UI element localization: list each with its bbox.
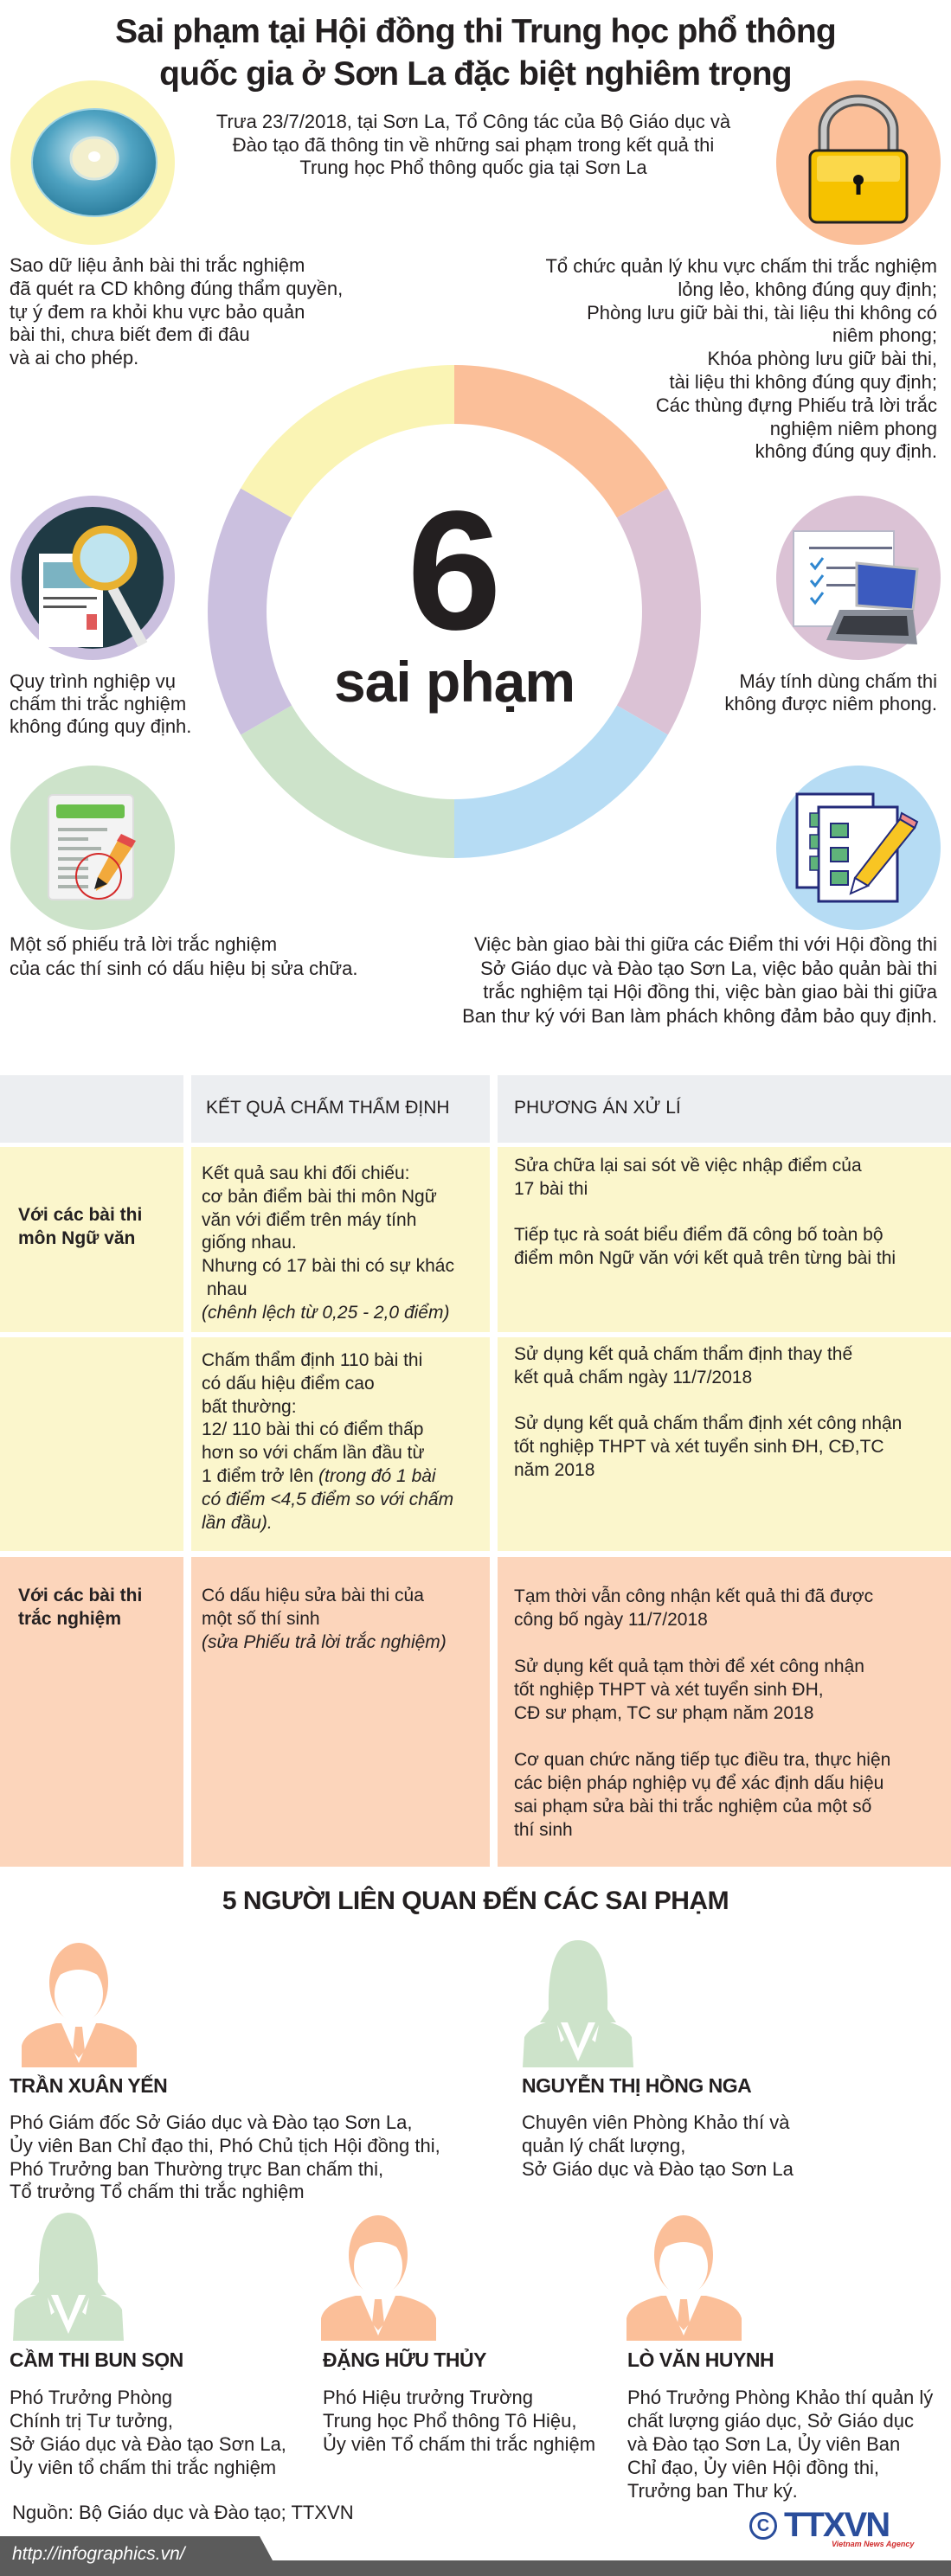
- table header: handling: PHƯƠNG ÁN XỬ LÍ: [514, 1098, 681, 1118]
- center number: 6: [407, 476, 502, 665]
- intro text: Đào tạo đã thông tin về những sai phạm trong kết quả thi: [233, 133, 714, 156]
- role: Chuyên viên Phòng Khảo thí và: [522, 2111, 789, 2133]
- role: chất lượng giáo dục, Sở Giáo dục: [627, 2410, 914, 2432]
- footer bar: [0, 2536, 951, 2576]
- table row 1 handling: Tiếp tục rà soát biểu điểm đã công bố toàn bộ: [514, 1225, 884, 1245]
- role: quản lý chất lượng,: [522, 2135, 685, 2156]
- table row 2 results: 1 điểm trở lên (trong đó 1 bài: [202, 1466, 436, 1486]
- text: answer sheet violation: [10, 933, 357, 979]
- table row 3 handling: sai phạm sửa bài thi trắc nghiệm của một số: [514, 1797, 871, 1817]
- person icon: Lò Văn Huynh (male): [627, 2215, 742, 2341]
- text: storage violation: [545, 255, 937, 462]
- table row 2 handling: Sử dụng kết quả chấm thẩm định xét công nhận: [514, 1413, 902, 1433]
- text: handover violation: Việc bàn giao bài thi giữa các Điểm thi với Hội đồng thi: [474, 933, 937, 955]
- icon: answer sheet with pencil: [10, 766, 175, 930]
- table row 2 results: Chấm thẩm định 110 bài thi: [202, 1350, 422, 1370]
- role: Phó Trưởng Phòng Khảo thí quản lý: [627, 2387, 933, 2408]
- role: Ủy viên Tổ chấm thi trắc nghiệm: [323, 2433, 595, 2455]
- icon: CD disc: [10, 80, 175, 245]
- role: và Đào tạo Sơn La, Ủy viên Ban: [627, 2433, 900, 2455]
- role: Chỉ đạo, Ủy viên Hội đồng thi,: [627, 2457, 879, 2478]
- table row 3 handling: Tạm thời vẫn công nhận kết quả thi đã được: [514, 1586, 873, 1606]
- table row 1 results: (chênh lệch từ 0,25 - 2,0 điểm): [202, 1303, 449, 1323]
- logo: TTXVN: Vietnam News Agency: [832, 2540, 914, 2548]
- person: Trần Xuân Yến: [10, 2074, 440, 2202]
- name: TRẦN XUÂN YẾN: [10, 2074, 167, 2097]
- text: CD violation: và ai cho phép.: [10, 347, 138, 368]
- table row 2 results: [191, 1337, 490, 1551]
- role: Phó Trưởng Phòng: [10, 2387, 172, 2408]
- icon: checklist with pencil: [776, 766, 941, 930]
- title: [115, 13, 836, 93]
- text: answer sheet violation: Một số phiếu trả lời trắc nghiệm: [10, 933, 277, 955]
- role: Phó Hiệu trưởng Trường: [323, 2387, 533, 2408]
- table row 3 handling: Cơ quan chức năng tiếp tục điều tra, thực hiện: [514, 1750, 890, 1770]
- intro text: Trung học Phổ thông quốc gia tại Sơn La: [299, 157, 647, 178]
- name: CẦM THI BUN SỌN: [10, 2349, 183, 2371]
- table header: results: KẾT QUẢ CHẤM THẨM ĐỊNH: [206, 1098, 450, 1118]
- name: ĐẶNG HỮU THỦY: [323, 2349, 486, 2371]
- icon: magnifier on document: [10, 496, 175, 660]
- icon: checklist and laptop: [776, 496, 941, 660]
- table row 1 label: môn Ngữ văn: [18, 1228, 135, 1248]
- table row 3 handling: tốt nghiệp THPT và xét tuyển sinh ĐH,: [514, 1680, 824, 1700]
- text: storage violation: nghiệm niêm phong: [770, 418, 937, 439]
- title: Sai phạm tại Hội đồng thi Trung học phổ thông: [115, 13, 836, 50]
- role: [323, 2387, 595, 2455]
- table row 3 results: một số thí sinh: [202, 1609, 320, 1629]
- role: Ủy viên Ban Chỉ đạo thi, Phó Chủ tịch Hội đồng thi,: [10, 2135, 440, 2156]
- name: NGUYỄN THỊ HỒNG NGA: [522, 2074, 751, 2097]
- role: Sở Giáo dục và Đào tạo Sơn La,: [10, 2433, 286, 2455]
- text: CD violation: tự ý đem ra khỏi khu vực bảo quản: [10, 301, 305, 323]
- icon: padlock: [776, 80, 941, 245]
- role: [10, 2387, 286, 2478]
- text: storage violation: Tổ chức quản lý khu vực chấm thi trắc nghiệm: [545, 255, 937, 277]
- section heading: 5 people: 5 NGƯỜI LIÊN QUAN ĐẾN CÁC SAI PHẠM: [222, 1887, 729, 1915]
- table row 3 label: Với các bài thi: [18, 1586, 142, 1605]
- table background cells: [0, 1075, 951, 1143]
- text: process violation: không đúng quy định.: [10, 715, 191, 737]
- person: Nguyễn Thị Hồng Nga: [522, 2074, 794, 2180]
- table row 2 handling: [498, 1337, 951, 1551]
- table row 3 handling: công bố ngày 11/7/2018: [514, 1610, 708, 1630]
- role: Chính trị Tư tưởng,: [10, 2410, 173, 2432]
- center label: sai phạm: [334, 650, 575, 714]
- text: storage violation: niêm phong;: [832, 324, 937, 346]
- person icon: Đặng Hữu Thủy (male): [321, 2215, 436, 2341]
- logo: TTXVN: [749, 2506, 915, 2548]
- table row 2 handling: năm 2018: [514, 1460, 594, 1480]
- role: Ủy viên tổ chấm thi trắc nghiệm: [10, 2457, 276, 2478]
- table row 1 handling: Sửa chữa lại sai sót về việc nhập điểm của: [514, 1156, 862, 1176]
- table row 2 label cell: [0, 1337, 183, 1551]
- table row 1 results: Nhưng có 17 bài thi có sự khác: [202, 1256, 454, 1276]
- table row 3 handling: các biện pháp nghiệp vụ để xác định dấu hiệu: [514, 1773, 884, 1793]
- role: [627, 2387, 933, 2502]
- intro text: [216, 111, 730, 178]
- text: computer violation: không được niêm phong.: [724, 693, 937, 714]
- text: storage violation: không đúng quy định.: [755, 440, 937, 462]
- role: Phó Giám đốc Sở Giáo dục và Đào tạo Sơn La,: [10, 2111, 412, 2133]
- donut chart: 6 sai phạm: [208, 365, 701, 858]
- table row 2 results: 12/ 110 bài thi có điểm thấp: [202, 1419, 423, 1439]
- table row 1 handling: [498, 1147, 951, 1332]
- table row 1 results: nhau: [207, 1279, 247, 1299]
- name: LÒ VĂN HUYNH: [627, 2349, 774, 2371]
- text: answer sheet violation: của các thí sinh có dấu hiệu bị sửa chữa.: [10, 958, 357, 979]
- text: storage violation: Các thùng đựng Phiếu trả lời trắc: [656, 394, 937, 416]
- text: handover violation: Sở Giáo dục và Đào tạo Sơn La, việc bảo quản bài thi: [480, 958, 937, 979]
- title: quốc gia ở Sơn La đặc biệt nghiêm trọng: [159, 55, 792, 93]
- role: Sở Giáo dục và Đào tạo Sơn La: [522, 2158, 794, 2180]
- table row 1 results: giống nhau.: [202, 1233, 297, 1253]
- text: CD violation: bài thi, chưa biết đem đi đâu: [10, 324, 250, 345]
- table row 2 results: hơn so với chấm lần đầu từ: [202, 1443, 425, 1463]
- source note: Nguồn: Bộ Giáo dục và Đào tạo; TTXVN: [12, 2502, 354, 2523]
- table row 3 results: [191, 1557, 490, 1867]
- text: handover violation: [462, 933, 937, 1027]
- table row 3 handling: Sử dụng kết quả tạm thời để xét công nhận: [514, 1656, 864, 1676]
- text: process violation: chấm thi trắc nghiệm: [10, 693, 186, 714]
- table row 1 results: cơ bản điểm bài thi môn Ngữ: [202, 1187, 437, 1207]
- role: Tổ trưởng Tổ chấm thi trắc nghiệm: [10, 2181, 305, 2202]
- table row 3 results: (sửa Phiếu trả lời trắc nghiệm): [202, 1632, 447, 1652]
- table row 3 handling: CĐ sư phạm, TC sư phạm năm 2018: [514, 1703, 813, 1723]
- text: process violation: Quy trình nghiệp vụ: [10, 670, 176, 692]
- text: storage violation: tài liệu thi không đúng quy định;: [670, 371, 937, 393]
- text: storage violation: Khóa phòng lưu giữ bài thi,: [707, 348, 937, 369]
- table row 1 handling: điểm môn Ngữ văn với kết quả trên từng bài thi: [514, 1248, 896, 1268]
- role: Phó Trưởng ban Thường trực Ban chấm thi,: [10, 2158, 383, 2180]
- logo: TTXVN: TTXVN: [784, 2506, 889, 2544]
- logo: TTXVN: C: [757, 2516, 769, 2535]
- role: [10, 2111, 440, 2202]
- table row 3 handling: thí sinh: [514, 1820, 573, 1840]
- table row 2 handling: kết quả chấm ngày 11/7/2018: [514, 1368, 752, 1387]
- table row 3 handling: [498, 1557, 951, 1867]
- role: Trung học Phổ thông Tô Hiệu,: [323, 2410, 577, 2432]
- text: CD violation: Sao dữ liệu ảnh bài thi trắc nghiệm: [10, 254, 305, 276]
- table row 3 label: trắc nghiệm: [18, 1609, 121, 1629]
- person: Lò Văn Huynh: [627, 2349, 933, 2502]
- text: computer violation: [724, 670, 937, 714]
- text: CD violation: [10, 254, 343, 368]
- person icon: Nguyễn Thị Hồng Nga (female): [523, 1940, 633, 2067]
- text: handover violation: trắc nghiệm tại Hội đồng thi, việc bàn giao bài thi giữa: [483, 981, 937, 1003]
- text: computer violation: Máy tính dùng chấm thi: [739, 670, 937, 692]
- role: [522, 2111, 794, 2180]
- table row 1 results: [191, 1147, 490, 1332]
- person icon: Cầm Thi Bun Sọn (female): [13, 2213, 124, 2341]
- table row 2 handling: tốt nghiệp THPT và xét tuyển sinh ĐH, CĐ,TC: [514, 1437, 884, 1457]
- person: Cầm Thi Bun Sọn: [10, 2349, 286, 2478]
- intro text: Trưa 23/7/2018, tại Sơn La, Tổ Công tác của Bộ Giáo dục và: [216, 111, 730, 132]
- table row 1 handling: 17 bài thi: [514, 1179, 588, 1199]
- text: CD violation: đã quét ra CD không đúng thẩm quyền,: [10, 278, 343, 299]
- table row 3 label: [0, 1557, 183, 1867]
- table row 2 results: có điểm <4,5 điểm so với chấm: [202, 1490, 453, 1509]
- table row 1 results: Kết quả sau khi đối chiếu:: [202, 1163, 410, 1183]
- footer url: http://infographics.vn/: [12, 2544, 185, 2564]
- table row 2 handling: Sử dụng kết quả chấm thẩm định thay thế: [514, 1344, 852, 1364]
- role: Trưởng ban Thư ký.: [627, 2480, 798, 2502]
- person: Đặng Hữu Thủy: [323, 2349, 595, 2455]
- text: process violation: [10, 670, 191, 737]
- text: handover violation: Ban thư ký với Ban làm phách không đảm bảo quy định.: [462, 1005, 937, 1027]
- text: storage violation: lỏng lẻo, không đúng quy định;: [678, 279, 937, 300]
- table row 1 results: văn với điểm trên máy tính: [202, 1210, 416, 1230]
- table row 2 results: có dấu hiệu điểm cao: [202, 1374, 375, 1394]
- table row 2 results: lần đầu).: [202, 1513, 273, 1533]
- table row 1 label: Với các bài thi: [18, 1205, 142, 1225]
- person icon: Trần Xuân Yến (male): [22, 1943, 137, 2067]
- table row 1 label: [0, 1147, 183, 1332]
- table row 2 results: bất thường:: [202, 1397, 297, 1417]
- table row 3 results: Có dấu hiệu sửa bài thi của: [202, 1586, 424, 1605]
- text: storage violation: Phòng lưu giữ bài thi, tài liệu thi không có: [587, 302, 937, 324]
